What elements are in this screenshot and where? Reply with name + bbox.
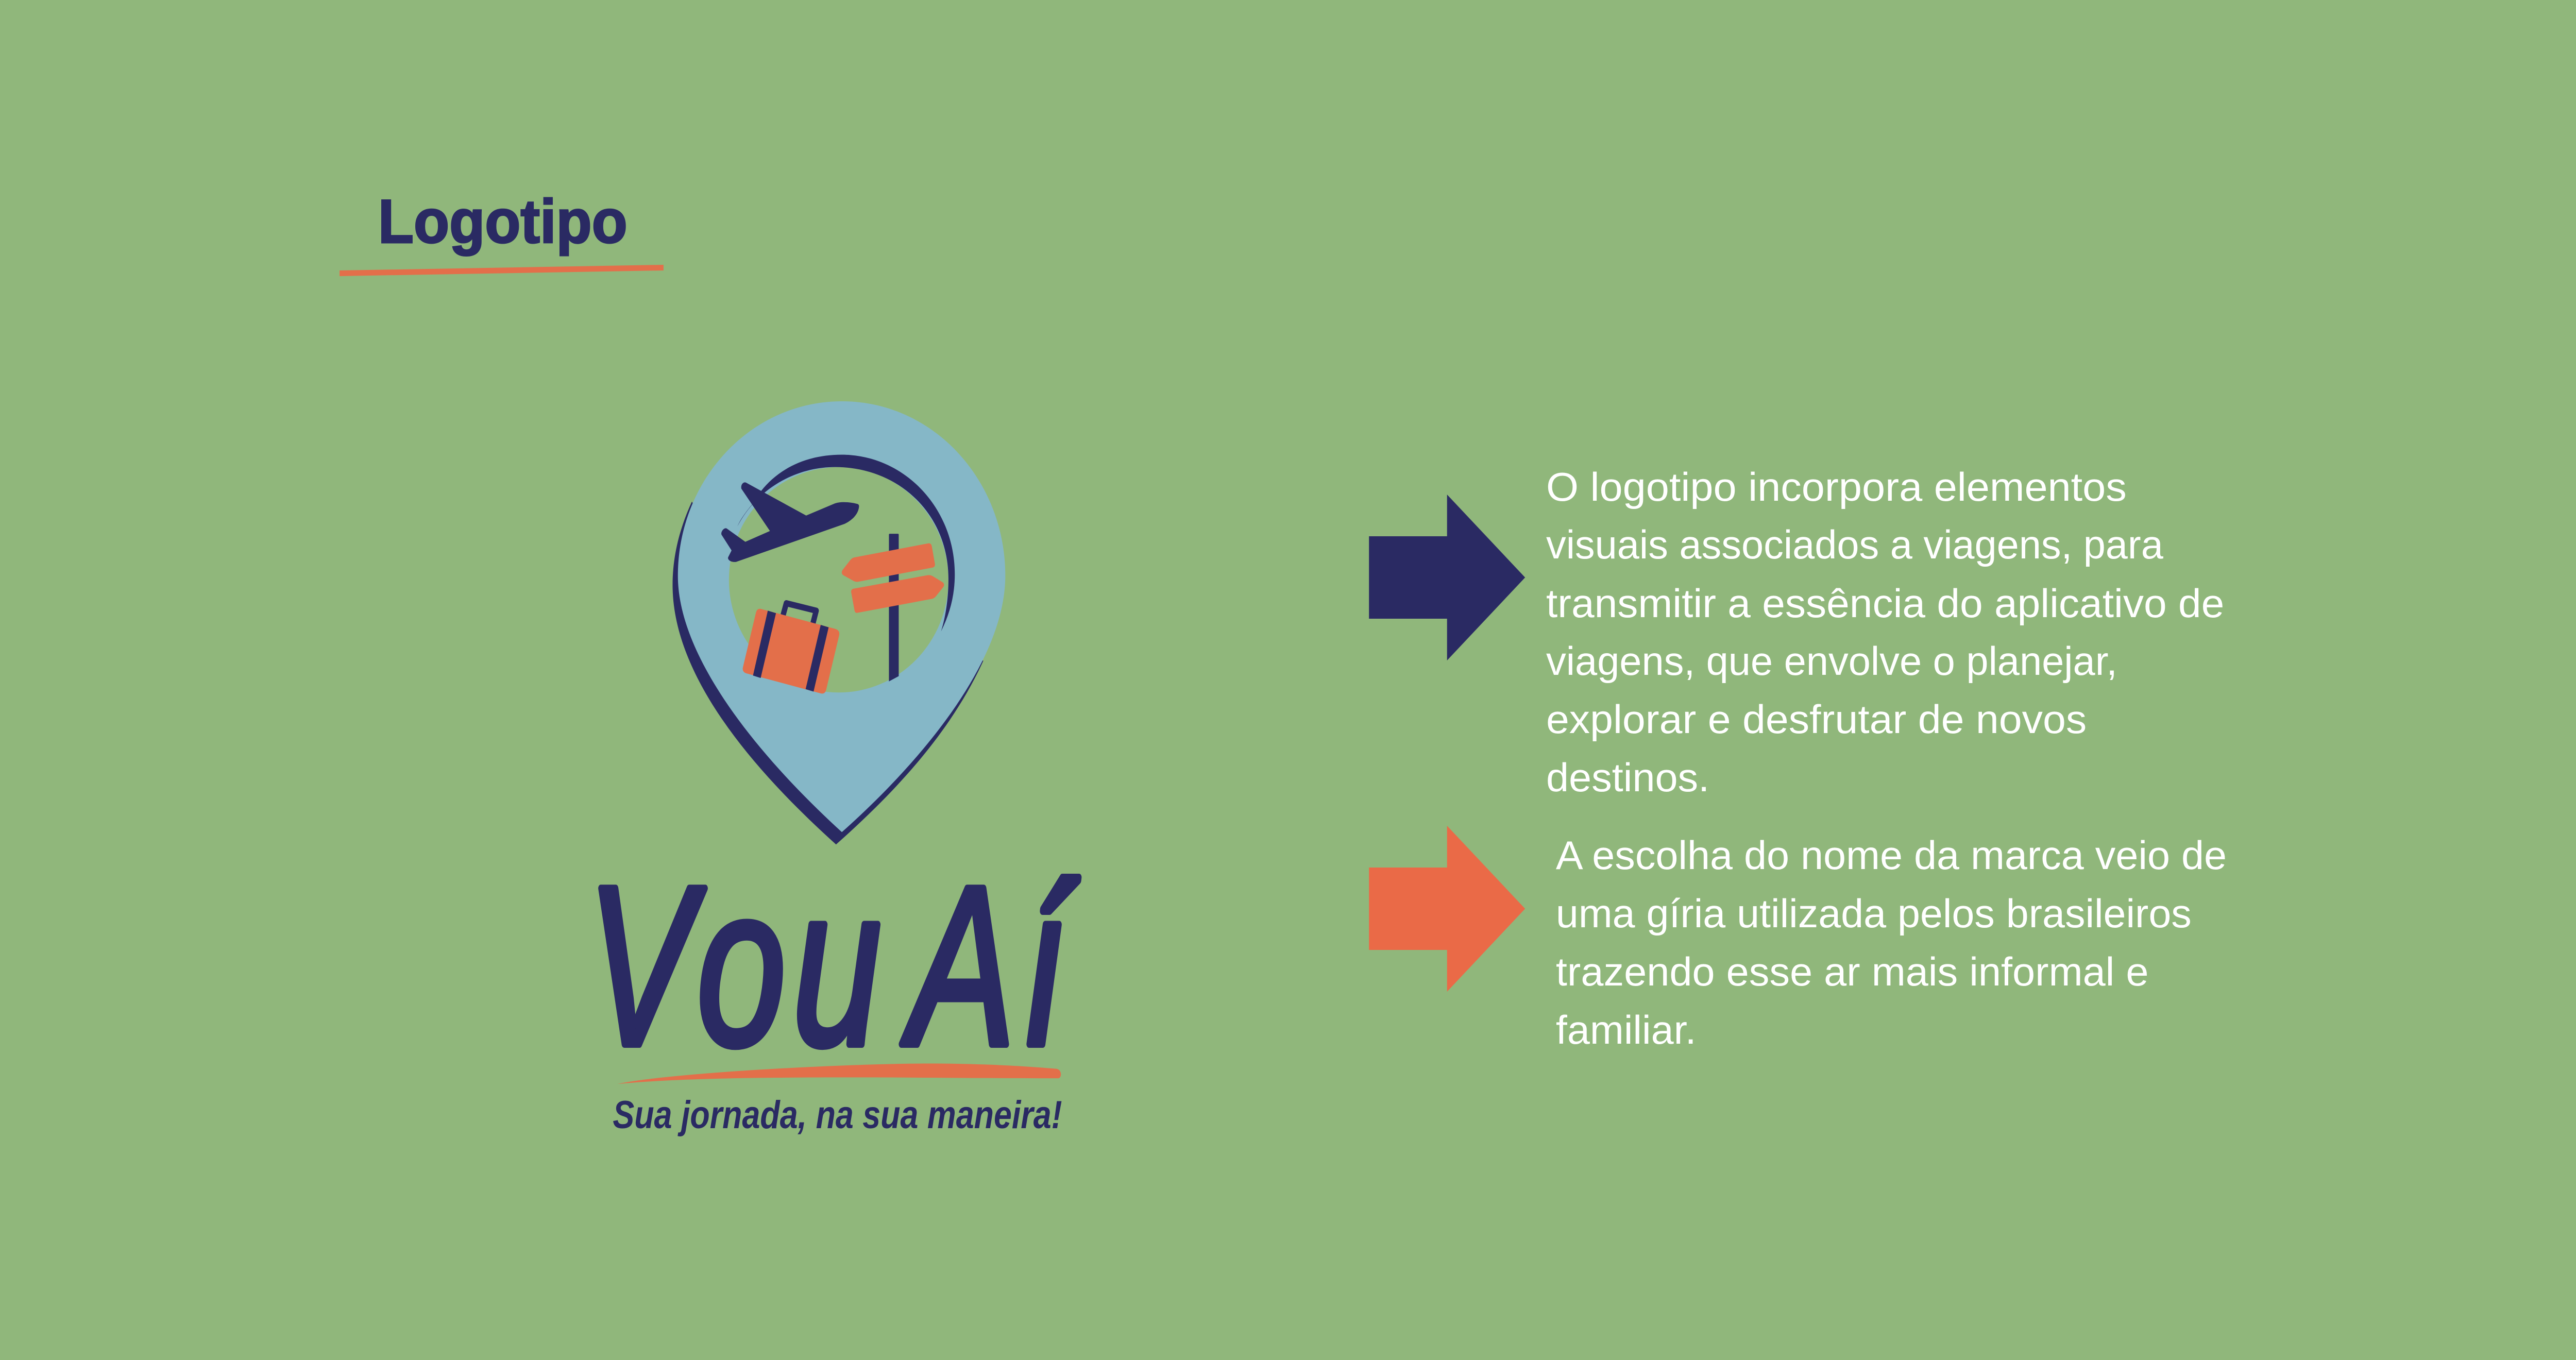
text block: logo description: visuais associados a viagens, para	[1546, 522, 2164, 567]
icon: map pin logo	[672, 401, 1005, 844]
pin shadow	[672, 502, 984, 844]
text block: logo description: transmitir a essência do aplicativo de	[1546, 581, 2224, 626]
pin body	[678, 401, 1005, 832]
text block: logo description: destinos.	[1546, 755, 1709, 800]
logo swoosh underline	[617, 1063, 1061, 1084]
text block: logo description: viagens, que envolve o planejar,	[1546, 639, 2117, 684]
icon: suitcase	[743, 603, 839, 693]
text block: brand name origin	[1556, 833, 2227, 1052]
text block: logo description	[1546, 465, 2224, 800]
text block: brand name origin: trazendo esse ar mais informal e	[1556, 949, 2148, 994]
text block: brand name origin: uma gíria utilizada pelos brasileiros	[1556, 891, 2192, 936]
text block: brand name origin: familiar.	[1556, 1008, 1697, 1052]
orbit crescent	[737, 455, 955, 632]
text block: logo description: explorar e desfrutar de novos	[1546, 697, 2087, 742]
heading underline	[340, 265, 664, 276]
heading: Logotipo	[340, 186, 664, 276]
text block: logo description: O logotipo incorpora elementos	[1546, 465, 2127, 509]
icon: airplane	[721, 482, 859, 562]
icon: signpost	[842, 534, 944, 682]
logo wordmark: VouAí: VouAí	[587, 839, 1079, 1093]
arrow: orange	[1369, 826, 1525, 992]
arrow: navy	[1369, 495, 1525, 660]
logo tagline: Sua jornada, na sua maneira!	[613, 1093, 1062, 1136]
pin hole	[729, 467, 948, 692]
text block: brand name origin: A escolha do nome da marca veio de	[1556, 833, 2227, 878]
heading: Logotipo: Logotipo	[378, 186, 628, 256]
